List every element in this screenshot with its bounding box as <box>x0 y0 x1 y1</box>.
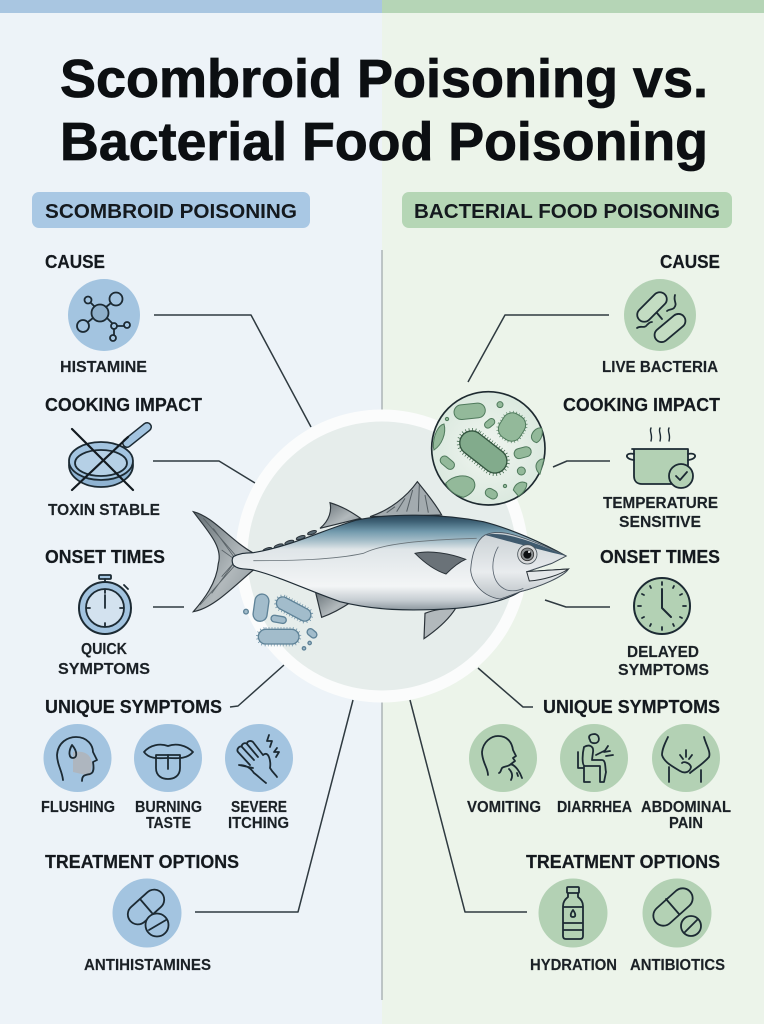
heading: scombroid poisoning: SCOMBROID POISONING <box>45 201 297 223</box>
body <box>232 515 568 610</box>
label: delayed symptoms: SYMPTOMS <box>618 662 709 679</box>
illustration: microscope view of bacteria <box>432 392 545 505</box>
label: burning taste <box>135 799 202 832</box>
label: severe itching: SEVERE <box>231 799 287 816</box>
icon: water bottle <box>538 878 608 948</box>
background: bacterial side <box>382 0 764 1024</box>
label: temperature sensitive: SENSITIVE <box>619 514 701 531</box>
heading: unique symptoms: UNIQUE SYMPTOMS <box>543 697 720 717</box>
top colour band: bacterial <box>382 0 764 13</box>
icon: severe itching hand <box>225 724 293 792</box>
label: diarrhea: DIARRHEA <box>557 799 632 816</box>
label: quick symptoms <box>58 641 150 678</box>
central circle <box>242 416 522 696</box>
label: temperature sensitive: TEMPERATURE <box>603 495 718 512</box>
label: severe itching <box>228 799 289 832</box>
label: antihistamines: ANTIHISTAMINES <box>84 957 211 974</box>
illustration: blue bacteria near tail <box>244 593 318 650</box>
first dorsal fin <box>320 503 361 528</box>
label: abdominal pain: ABDOMINAL <box>641 799 731 816</box>
icon: clock <box>634 578 690 634</box>
label: temperature sensitive <box>603 495 718 531</box>
pelvic fin <box>424 608 456 639</box>
jaw <box>527 569 568 581</box>
icon: abdominal pain <box>652 724 720 792</box>
illustration: tuna fish <box>193 482 568 639</box>
pectoral fin <box>415 552 466 574</box>
leader lines <box>153 315 610 912</box>
label: abdominal pain: PAIN <box>669 815 703 832</box>
heading: cooking impact: COOKING IMPACT <box>45 395 202 415</box>
heading: treatment options: TREATMENT OPTIONS <box>526 852 720 872</box>
icon: antihistamine pills <box>112 878 182 948</box>
heading: cause: CAUSE <box>660 252 720 272</box>
title: Bacterial Food Poisoning <box>60 112 708 172</box>
title: Scombroid Poisoning vs. <box>60 49 708 109</box>
icon: histamine molecule <box>68 279 140 351</box>
label: antibiotics: ANTIBIOTICS <box>630 957 725 974</box>
icon: live bacteria <box>624 279 696 351</box>
lateral line <box>253 538 477 561</box>
second dorsal fin <box>370 482 442 517</box>
panel: scombroid column <box>41 252 293 974</box>
icon: vomiting <box>469 724 537 792</box>
panel: bacterial column <box>467 252 731 974</box>
label: hydration: HYDRATION <box>530 957 617 974</box>
finlets <box>262 530 317 590</box>
label: severe itching: ITCHING <box>228 815 289 832</box>
head plate <box>471 532 568 599</box>
label: delayed symptoms: DELAYED <box>627 644 699 661</box>
label: quick symptoms: QUICK <box>81 641 127 658</box>
background: scombroid side <box>0 0 382 1024</box>
icon: diarrhea <box>560 724 628 792</box>
label: flushing: FLUSHING <box>41 799 115 816</box>
heading: bacterial food poisoning: BACTERIAL FOOD POISONING <box>414 201 720 223</box>
label: burning taste: TASTE <box>146 815 191 832</box>
heading: scombroid poisoning <box>32 192 310 228</box>
label: vomiting: VOMITING <box>467 799 541 816</box>
heading: cause: CAUSE <box>45 252 105 272</box>
heading: onset times: ONSET TIMES <box>45 547 165 567</box>
icon: crossed-out pan <box>69 427 147 490</box>
heading: treatment options: TREATMENT OPTIONS <box>45 852 239 872</box>
label: histamine: HISTAMINE <box>60 359 147 376</box>
label: burning taste: BURNING <box>135 799 202 816</box>
icon: stopwatch <box>79 575 131 634</box>
icon: antibiotic capsules <box>642 878 712 948</box>
label: quick symptoms: SYMPTOMS <box>58 661 150 678</box>
icon: flushing <box>44 724 112 792</box>
anal fin <box>315 590 352 617</box>
eye <box>518 545 537 564</box>
heading: onset times: ONSET TIMES <box>600 547 720 567</box>
label: abdominal pain <box>641 799 731 832</box>
icon: burning tongue <box>134 724 202 792</box>
heading: unique symptoms: UNIQUE SYMPTOMS <box>45 697 222 717</box>
top colour band: scombroid <box>0 0 382 13</box>
heading: bacterial food poisoning <box>402 192 732 228</box>
heading: cooking impact: COOKING IMPACT <box>563 395 720 415</box>
label: toxin stable: TOXIN STABLE <box>48 502 160 519</box>
tail fin <box>193 512 253 612</box>
label: delayed symptoms <box>618 644 709 679</box>
icon: steaming pot with check <box>627 428 695 488</box>
label: live bacteria: LIVE BACTERIA <box>602 359 718 376</box>
title <box>60 49 708 172</box>
